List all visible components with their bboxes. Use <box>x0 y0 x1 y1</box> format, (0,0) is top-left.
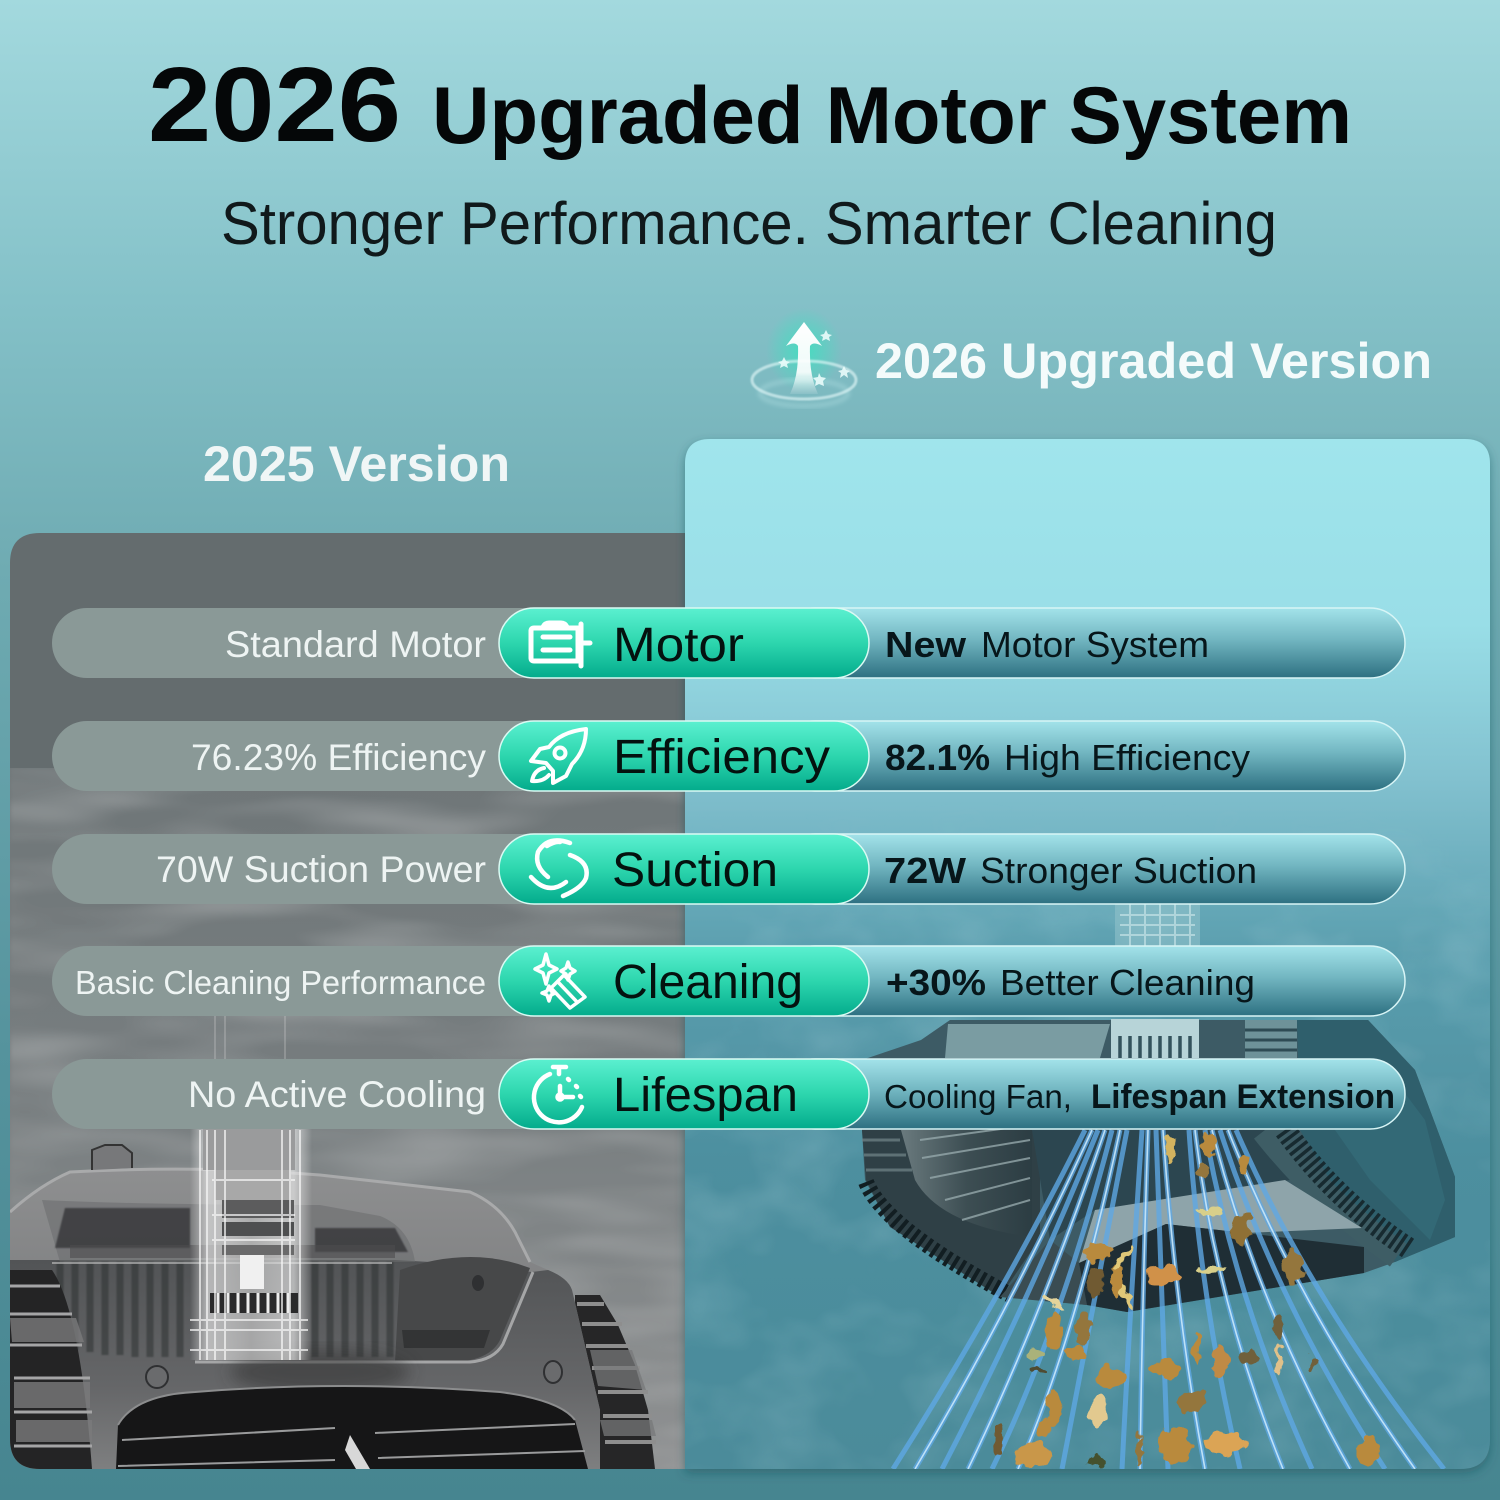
row: efficiency <box>52 721 1405 791</box>
2026 value: cleaning: +30% <box>886 962 986 1003</box>
2025 value: efficiency <box>52 721 572 791</box>
motor column <box>190 1128 312 1360</box>
2026 value: cleaning: Better Cleaning <box>1000 962 1255 1003</box>
knob <box>92 1145 132 1170</box>
label pill: lifespan <box>499 1059 869 1129</box>
heading: 2026 upgraded version: 2026 Upgraded Version <box>875 333 1432 389</box>
upper motor <box>1115 904 1200 948</box>
2026 value: efficiency: High Efficiency <box>1004 737 1250 778</box>
2025 value: suction <box>52 834 572 904</box>
suction streams <box>893 1130 1444 1469</box>
2026 value: efficiency <box>780 721 1405 791</box>
2026 value: new motor system <box>780 608 1405 678</box>
2026 value: efficiency: 82.1% <box>885 737 990 778</box>
leaves <box>991 1134 1379 1467</box>
right track <box>575 1295 656 1469</box>
2025 value: efficiency: 76.23% Efficiency <box>191 737 486 778</box>
icon: motor <box>531 623 590 666</box>
rear shell <box>10 1171 600 1410</box>
label pill: lifespan: Lifespan <box>613 1069 798 1122</box>
label pill: suction <box>499 834 869 904</box>
title <box>148 46 1352 164</box>
robot: 2025 model <box>10 1128 656 1469</box>
2025 value: standard motor: Standard Motor <box>225 624 486 665</box>
label pill: motor: Motor <box>613 619 744 672</box>
2025 value: suction: 70W Suction Power <box>156 849 486 890</box>
2026 value: suction: 72W <box>884 850 966 891</box>
label pill: suction: Suction <box>612 844 778 897</box>
2026 value: lifespan: Lifespan Extension <box>1091 1078 1395 1116</box>
lower body <box>10 1260 600 1469</box>
2025 value: cleaning: Basic Cleaning Performance <box>75 964 486 1001</box>
sensors <box>146 1361 562 1388</box>
2026 value: suction: Stronger Suction <box>980 850 1257 891</box>
label pill: efficiency: Efficiency <box>613 731 830 784</box>
row: suction <box>52 834 1405 904</box>
left track <box>862 1125 1040 1297</box>
icon: rocket <box>531 729 586 783</box>
2026 value: suction <box>780 834 1405 904</box>
center housing <box>1032 1130 1290 1240</box>
2026 value: cleaning <box>780 946 1405 1016</box>
2025 value: lifespan <box>52 1059 572 1129</box>
panel: 2026 upgraded version <box>685 439 1490 1469</box>
row: cleaning <box>52 946 1405 1016</box>
icon: suction swirl <box>531 840 587 896</box>
2025 value: cleaning <box>52 946 572 1016</box>
row: lifespan <box>52 1059 1405 1129</box>
window <box>42 1200 415 1262</box>
left track <box>10 1270 92 1469</box>
label pill: motor <box>499 608 869 678</box>
heading: 2025 version: 2025 Version <box>203 436 510 492</box>
2026 value: new motor system: New <box>885 624 967 665</box>
front grille <box>116 1386 588 1469</box>
row: motor <box>52 608 1405 678</box>
right track <box>1265 1130 1398 1255</box>
2025 value: standard motor <box>52 608 572 678</box>
label pill: cleaning <box>499 946 869 1016</box>
label pill: cleaning: Cleaning <box>613 956 803 1009</box>
icon: stopwatch <box>534 1067 582 1122</box>
title: 2026 <box>148 46 401 164</box>
robot body <box>862 1020 1455 1312</box>
2026 value: lifespan <box>780 1059 1405 1129</box>
vertical ribs <box>60 1262 390 1357</box>
2026 value: lifespan: Cooling Fan, <box>884 1078 1072 1115</box>
icon: upgrade arrow <box>752 308 856 406</box>
subtitle: Stronger Performance. Smarter Cleaning <box>221 190 1277 257</box>
label pill: efficiency <box>499 721 869 791</box>
2026 value: new motor system: Motor System <box>981 624 1209 665</box>
2025 value: lifespan: No Active Cooling <box>188 1074 486 1115</box>
icon: cleaning sparkles <box>535 954 585 1008</box>
panel: 2025 version <box>10 533 685 1469</box>
center band <box>1079 1180 1362 1263</box>
robot: 2026 model with suction streams <box>685 904 1490 1469</box>
title: Upgraded Motor System <box>432 71 1352 161</box>
